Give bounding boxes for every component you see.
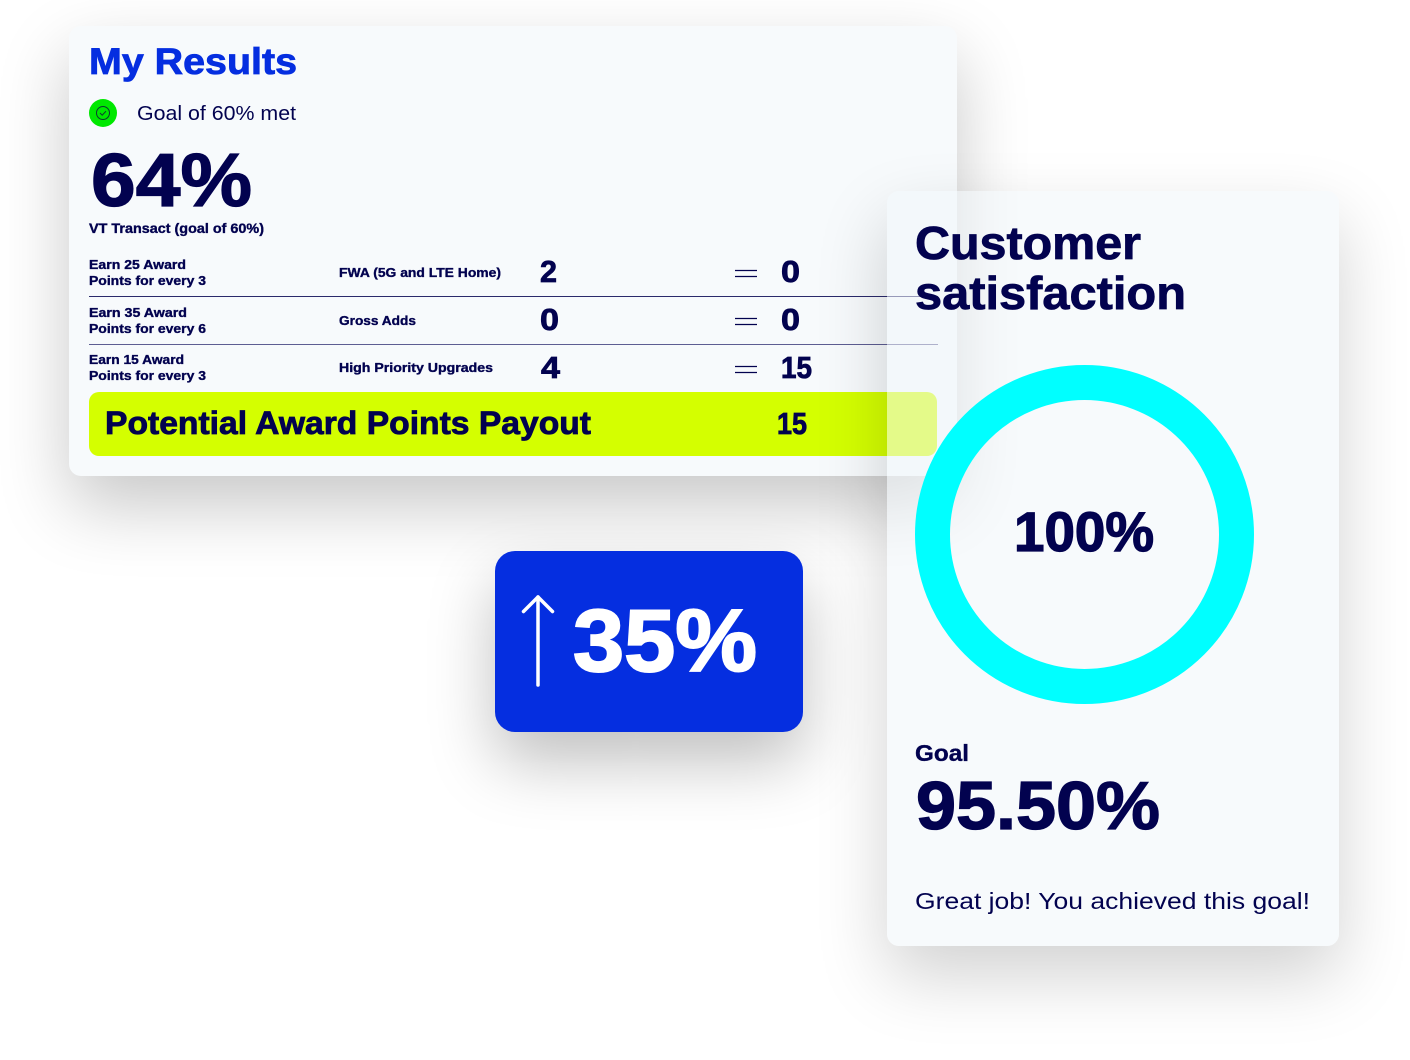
callout: up 35%	[495, 551, 803, 732]
heading: customer satisfaction: satisfaction	[915, 267, 1186, 319]
table row: gross adds: 0	[540, 302, 559, 337]
table row: FWA: 2	[540, 254, 557, 289]
icon: green check badge	[89, 99, 117, 127]
number: 35%: 35%	[573, 591, 757, 690]
table row: FWA: 0	[781, 254, 800, 289]
text: achievement message: Great job! You achieved this goal!	[915, 888, 1310, 914]
caption: vt transact: VT Transact (goal of 60%)	[89, 221, 264, 236]
payout bar: 15	[777, 406, 807, 441]
table row: FWA	[89, 254, 800, 289]
table row: FWA: FWA (5G and LTE Home)	[339, 265, 501, 280]
text: goal met: Goal of 60% met	[137, 103, 296, 125]
table row: high priority upgrades: 15	[781, 350, 812, 385]
donut chart: 100%: 100%	[1014, 500, 1154, 563]
table row: high priority upgrades: 4	[541, 350, 561, 385]
table row: FWA: Points for every 3	[89, 273, 206, 288]
donut chart: 100%	[932, 382, 1236, 686]
table row: gross adds: 0	[781, 302, 800, 337]
heading: customer satisfaction: Customer	[915, 217, 1141, 269]
table row: high priority upgrades	[89, 350, 812, 385]
table row: high priority upgrades: High Priority Upgrades	[339, 360, 493, 375]
table row: FWA: Earn 25 Award	[89, 257, 186, 272]
label: goal: Goal	[915, 740, 969, 766]
table row: gross adds: Gross Adds	[339, 313, 416, 328]
table row: high priority upgrades: Earn 15 Award	[89, 352, 184, 367]
table row: gross adds: Points for every 6	[89, 321, 206, 336]
heading: my results: My Results	[89, 41, 297, 82]
panel: my results	[69, 26, 957, 476]
payout bar	[89, 392, 937, 456]
heading: customer satisfaction	[915, 217, 1186, 319]
table row: gross adds: Earn 35 Award	[89, 305, 187, 320]
icon: up arrow	[524, 597, 552, 685]
table row: high priority upgrades: Points for every 3	[89, 368, 206, 383]
panel: customer satisfaction	[887, 191, 1339, 946]
table row: gross adds	[89, 302, 800, 337]
number: goal value: 95.50%	[916, 768, 1160, 844]
big number: 64%: 64%	[91, 138, 252, 222]
payout bar: Potential Award Points Payout	[105, 405, 591, 441]
